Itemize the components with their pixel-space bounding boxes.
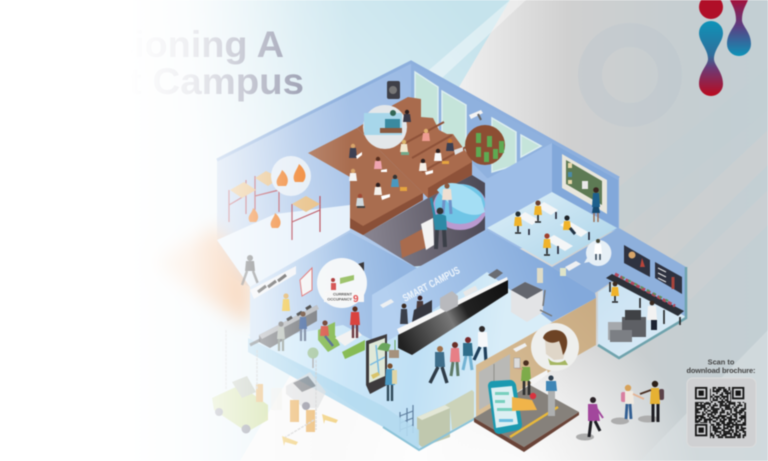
steel scaffold bbox=[400, 405, 413, 436]
mail envelope bbox=[512, 397, 537, 411]
panel: fire room bbox=[150, 156, 350, 324]
copier bbox=[511, 282, 552, 322]
video bubble bbox=[363, 105, 407, 149]
windows bbox=[415, 72, 541, 172]
occupancy value: 9 bbox=[353, 294, 359, 305]
corridor camera bbox=[469, 110, 483, 120]
standing presenter bbox=[442, 183, 452, 214]
lecturer and podium bbox=[400, 198, 447, 258]
counter people bbox=[277, 321, 285, 351]
scanner and camera on wall bbox=[513, 343, 527, 368]
panel: parking bbox=[212, 330, 338, 446]
signpost tree bbox=[308, 348, 318, 368]
elevator doors bbox=[479, 354, 510, 410]
service counter bbox=[259, 305, 317, 348]
student in yellow bbox=[640, 381, 664, 422]
panel: entrance bbox=[474, 298, 596, 452]
panel: lobby bbox=[248, 230, 596, 450]
students group bbox=[430, 326, 488, 383]
logo bbox=[699, 0, 751, 96]
desk printers bbox=[440, 291, 458, 312]
cafe wall bbox=[250, 232, 417, 342]
receptionists bbox=[400, 304, 408, 324]
students bbox=[349, 110, 463, 208]
cooling tanks bbox=[417, 390, 474, 447]
notification dot bbox=[530, 393, 536, 399]
floor strip bbox=[248, 338, 419, 450]
desks and students bbox=[514, 200, 589, 255]
cafe area bbox=[250, 258, 367, 368]
gray floor bbox=[474, 385, 579, 447]
wall sensor bbox=[537, 268, 543, 283]
boxes on racks bbox=[230, 171, 320, 212]
panel: lecture hall bbox=[308, 72, 541, 268]
sofas and visitors bbox=[318, 322, 340, 352]
dark pillar bbox=[346, 262, 364, 298]
occupancy label: CURRENT bbox=[333, 292, 353, 296]
entry arrows bbox=[282, 414, 338, 446]
qr label: download brochure: bbox=[686, 366, 756, 375]
reception desk bbox=[397, 269, 508, 355]
tan wall bbox=[476, 298, 596, 418]
info board bbox=[300, 268, 312, 296]
doctor bubble bbox=[584, 239, 611, 266]
wall camera bbox=[380, 299, 394, 308]
title bbox=[33, 24, 304, 102]
lab screens bbox=[624, 245, 650, 277]
lobby floor bbox=[248, 260, 552, 450]
upper stairs bbox=[357, 97, 472, 198]
lower seating floor bbox=[308, 128, 423, 235]
solar panel bbox=[250, 266, 296, 299]
lab benches bbox=[606, 274, 684, 325]
lab workers and machine bbox=[608, 282, 657, 342]
panel: classroom bbox=[485, 143, 618, 265]
gate and visitor bbox=[529, 370, 557, 416]
occupancy bubble bbox=[317, 258, 367, 308]
face recognition bubble bbox=[531, 323, 579, 371]
map kiosk bbox=[366, 334, 397, 401]
fire room floor bbox=[150, 226, 252, 324]
building: upper back walls bbox=[217, 62, 619, 287]
parking barriers bbox=[256, 384, 315, 432]
teacher bbox=[592, 187, 600, 222]
chalkboard bbox=[562, 154, 607, 214]
plants bubble bbox=[465, 125, 505, 165]
qr code card bbox=[687, 378, 756, 447]
holographic car bbox=[433, 183, 487, 230]
occupancy bubble: OCCUPANCY bbox=[327, 296, 352, 302]
student with backpack bbox=[621, 385, 644, 419]
qr label: Scan to bbox=[708, 358, 735, 366]
qr label bbox=[686, 358, 756, 375]
silver car bbox=[286, 372, 326, 410]
wall label text: SMART CAMPUS bbox=[401, 264, 462, 305]
title: Envisioning A bbox=[33, 24, 284, 65]
dark stage floor bbox=[363, 175, 485, 268]
camera and supplies bbox=[560, 261, 581, 276]
walking student bbox=[588, 397, 603, 437]
person in fire room bbox=[242, 255, 258, 285]
security camera bbox=[387, 81, 400, 99]
reception wall bbox=[372, 230, 596, 350]
outdoor people bbox=[576, 381, 664, 440]
phone with chat bbox=[488, 380, 537, 434]
potted plant bbox=[378, 340, 399, 358]
person at scanner bbox=[515, 360, 531, 395]
storage racks bbox=[229, 176, 320, 240]
title: Smart Campus bbox=[33, 61, 304, 102]
green car bbox=[212, 376, 268, 434]
flames bbox=[249, 156, 311, 228]
panel: biology lab bbox=[552, 228, 686, 358]
